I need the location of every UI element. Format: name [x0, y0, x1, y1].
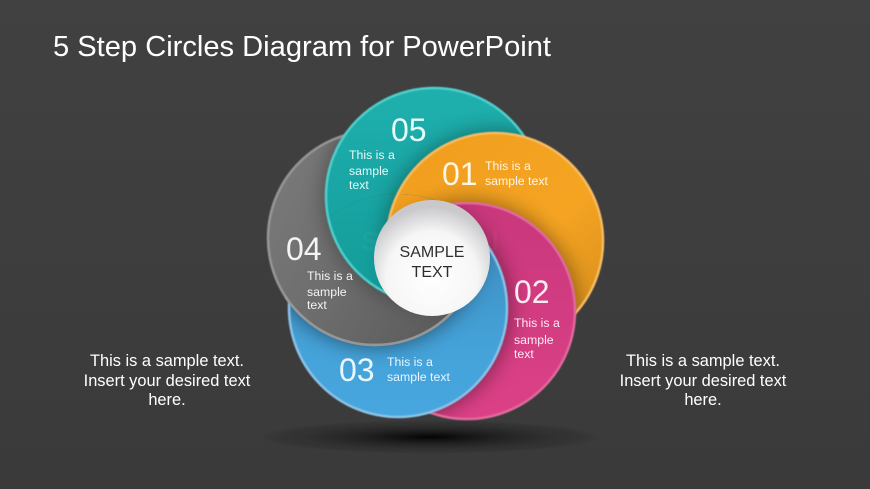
left text block: This is a sample text. [90, 352, 244, 370]
step 05 text: text [349, 178, 369, 192]
center sphere [374, 200, 490, 316]
right text block [620, 352, 787, 409]
step 01 text: 01 [442, 156, 478, 192]
step 04 text: This is a [307, 269, 353, 283]
title: 5 Step Circles Diagram for PowerPoint [53, 31, 551, 63]
center label: SAMPLE [400, 244, 464, 261]
step 01 text: sample text [485, 174, 548, 188]
step 02 text: This is a [514, 316, 560, 330]
step 02 text: text [514, 347, 534, 361]
right text block: This is a sample text. [626, 352, 780, 370]
step 01 text [442, 156, 548, 192]
ground shadow [260, 420, 600, 454]
spiral diagram [267, 87, 604, 420]
step 02 text [514, 274, 560, 361]
circle 03: blue [287, 243, 509, 419]
left text block: here. [148, 391, 186, 409]
step 04 text: text [307, 298, 327, 312]
right text block: here. [684, 391, 722, 409]
step 01 text: This is a [485, 159, 531, 173]
watermark: SlideModel [361, 226, 499, 256]
step 03 text: sample text [387, 370, 450, 384]
circle 01: orange [396, 130, 605, 316]
circle 04: grey base [266, 134, 344, 303]
step 02 text: sample [514, 333, 554, 347]
circle 05: teal [324, 86, 526, 219]
left text block: Insert your desired text [84, 372, 251, 390]
step 04 text: sample [307, 285, 347, 299]
overlap closing the spiral [284, 194, 455, 346]
circle 02: pink [428, 201, 577, 421]
step 03 text [339, 352, 450, 388]
step 02 text: 02 [514, 274, 550, 310]
step 04 text: 04 [286, 231, 322, 267]
left text block [84, 352, 251, 409]
step 05 text: This is a [349, 148, 395, 162]
center sphere: TEXT [412, 264, 453, 281]
step 05 text: 05 [391, 112, 427, 148]
step 05 text [349, 112, 427, 192]
right text block: Insert your desired text [620, 372, 787, 390]
step 03 text: This is a [387, 355, 433, 369]
step 03 text: 03 [339, 352, 375, 388]
step 05 text: sample [349, 164, 389, 178]
step 04 text [286, 231, 353, 312]
